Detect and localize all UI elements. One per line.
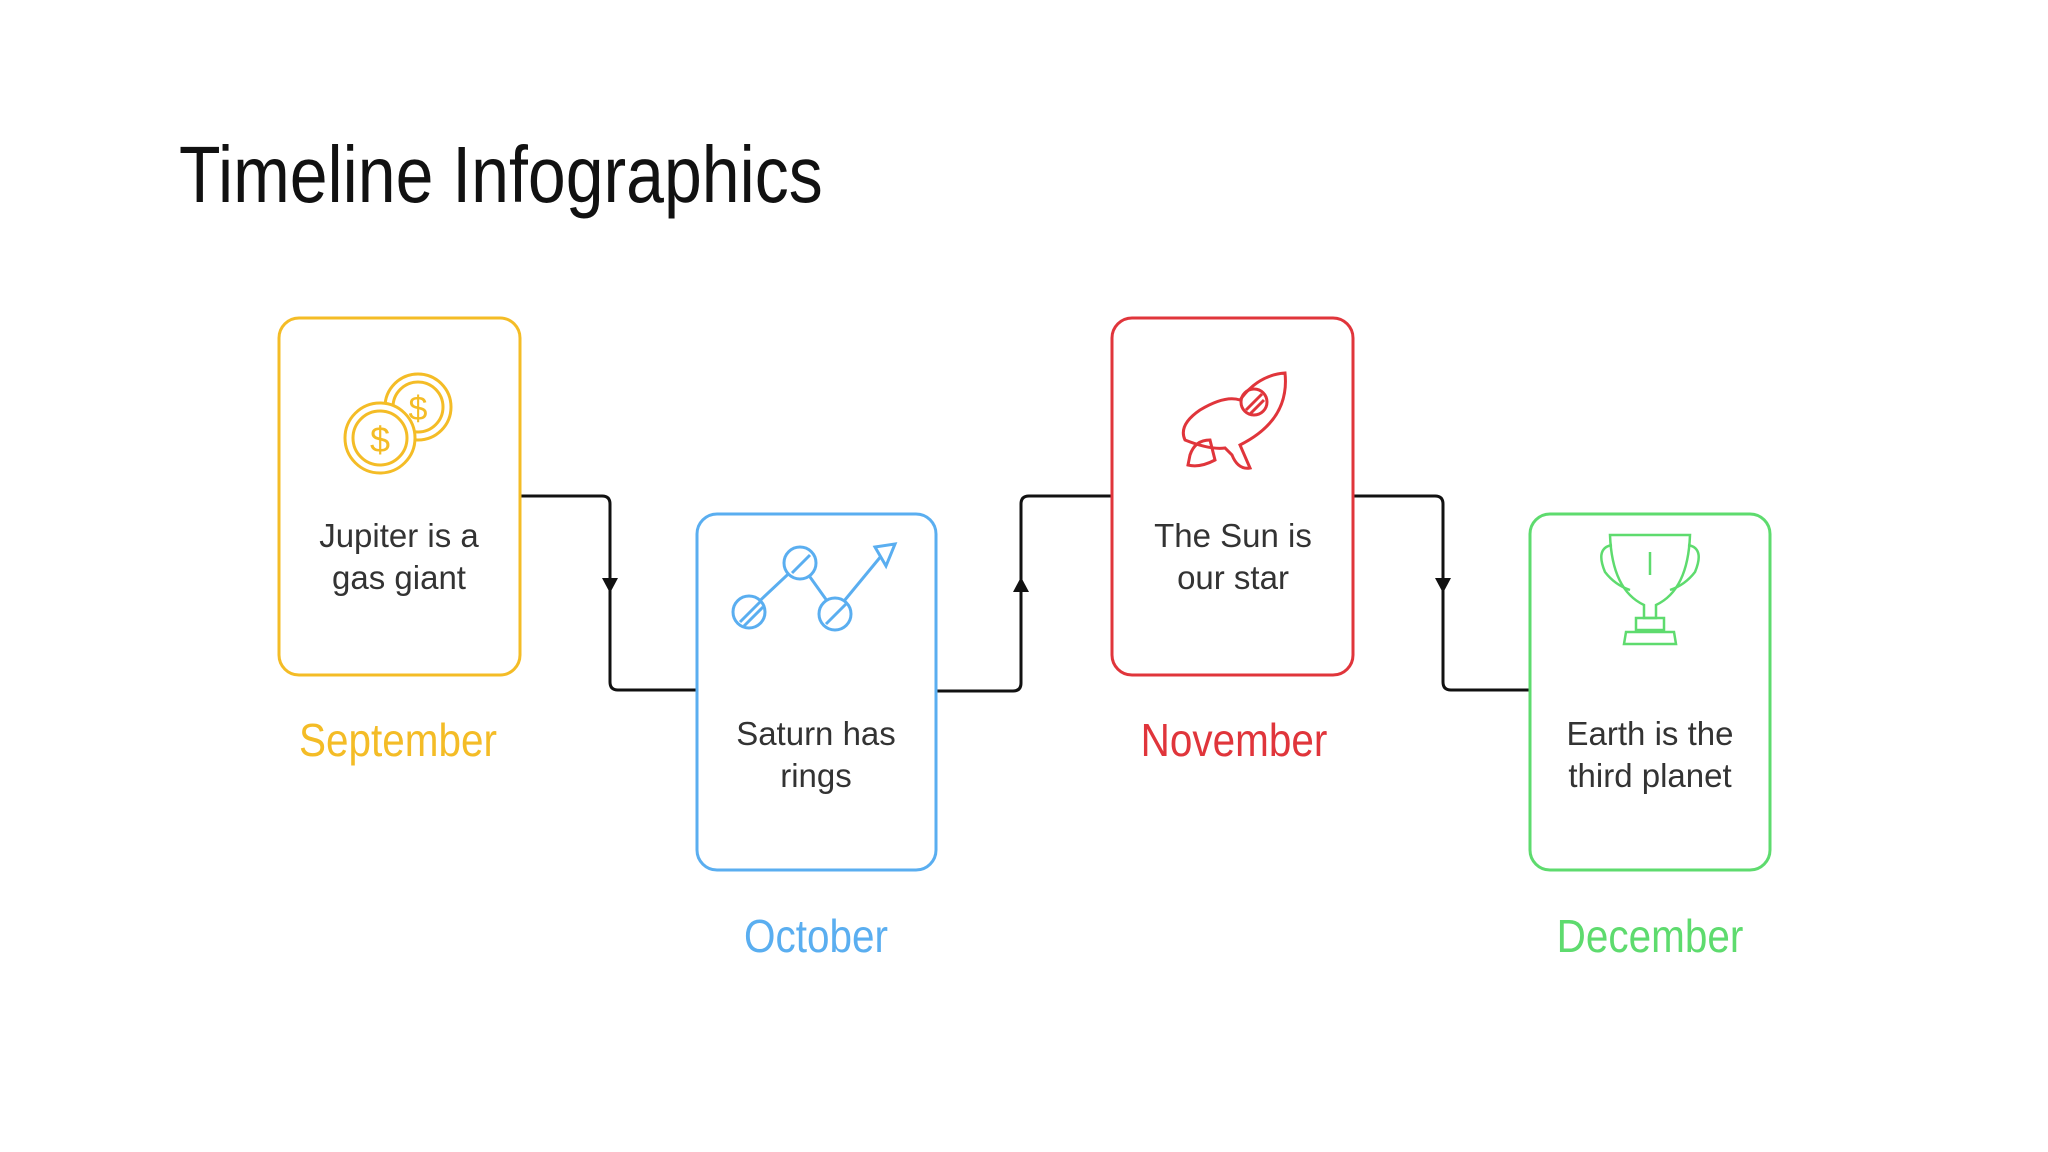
icon: trophy — [1601, 535, 1699, 644]
connector arrow: October to November — [936, 496, 1111, 691]
text: Earth: Earth is the — [1567, 715, 1733, 752]
card: October — [697, 514, 936, 870]
card: September — [279, 318, 520, 675]
icon: coins: $ — [370, 419, 390, 460]
label: October: October — [744, 912, 888, 963]
text: Saturn: Saturn has — [736, 715, 896, 752]
icon: rocket — [1183, 373, 1285, 468]
text: Jupiter: Jupiter is a — [319, 517, 479, 554]
title: Timeline Infographics — [179, 130, 823, 219]
icon: coins — [345, 374, 451, 473]
label: September: September — [299, 716, 497, 767]
card: November: our star — [1177, 559, 1289, 596]
text: Sun: The Sun is — [1154, 517, 1312, 554]
connector arrow: November to December — [1353, 496, 1529, 690]
icon: coins: $ — [409, 390, 428, 428]
card: December — [1530, 514, 1770, 870]
icon: chart — [733, 544, 895, 630]
label: November: November — [1141, 716, 1327, 767]
label: December: December — [1557, 912, 1743, 963]
card: December: third planet — [1568, 757, 1732, 794]
card: September: gas giant — [332, 559, 466, 596]
card: October: rings — [780, 757, 852, 794]
connector arrow: September to October — [520, 496, 696, 690]
card: November — [1112, 318, 1353, 675]
